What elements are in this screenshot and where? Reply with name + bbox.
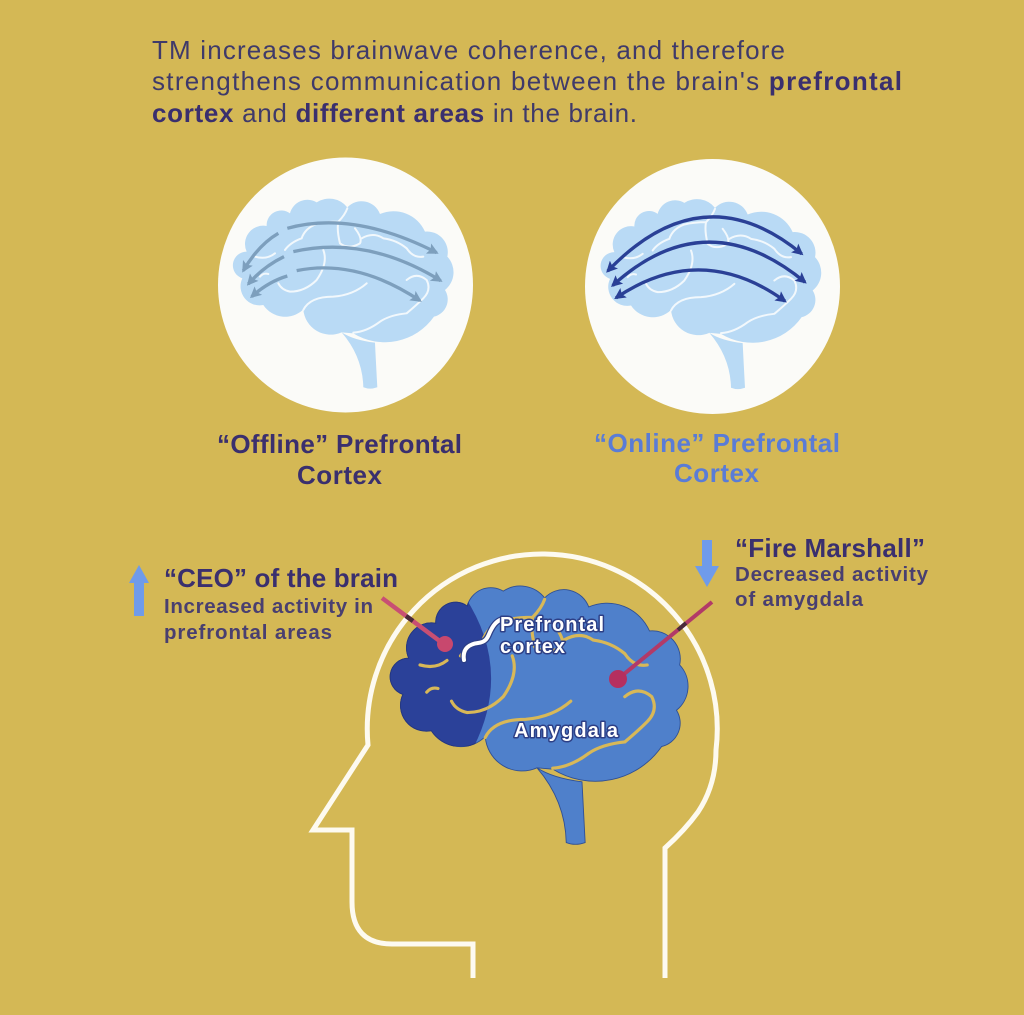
callout: fire marshall	[735, 533, 929, 611]
panel: offline prefrontal cortex brain	[218, 158, 473, 412]
label: prefrontal cortex: cortex	[500, 636, 565, 658]
callout: fire marshall: of amygdala	[735, 588, 864, 611]
icon: down arrow	[695, 540, 719, 587]
intro text: strengthens communication between the brain's prefrontal	[152, 66, 902, 96]
label: offline	[217, 429, 462, 490]
callout: ceo of the brain: Increased activity in	[164, 595, 373, 618]
intro text: TM increases brainwave coherence, and therefore	[152, 35, 785, 65]
callout: fire marshall: “Fire Marshall”	[735, 533, 925, 563]
callout: fire marshall: Decreased activity	[735, 563, 929, 586]
label: offline: “Offline” Prefrontal	[217, 429, 462, 459]
pointer: ceo	[382, 598, 453, 652]
label: offline: Cortex	[297, 460, 383, 490]
callout: ceo of the brain: prefrontal areas	[164, 621, 332, 644]
pointer: fire marshall	[609, 602, 712, 688]
prefrontal dark area	[390, 602, 492, 746]
label: amygdala: Amygdala	[514, 720, 619, 742]
head outline	[313, 554, 717, 978]
label: online: “Online” Prefrontal	[594, 428, 840, 458]
panel: online prefrontal cortex brain	[585, 159, 840, 414]
label: online	[594, 428, 840, 488]
large brain	[390, 586, 688, 844]
infographic	[129, 40, 928, 978]
callout bracket	[464, 619, 503, 660]
callout: ceo of the brain: “CEO” of the brain	[164, 563, 398, 593]
intro text	[152, 35, 902, 128]
intro text: cortex and different areas in the brain.	[152, 98, 637, 128]
label: online: Cortex	[674, 458, 760, 488]
callout: ceo of the brain	[164, 563, 398, 644]
label: prefrontal cortex	[500, 614, 604, 658]
icon: up arrow	[129, 565, 149, 616]
label: prefrontal cortex: Prefrontal	[500, 614, 604, 636]
